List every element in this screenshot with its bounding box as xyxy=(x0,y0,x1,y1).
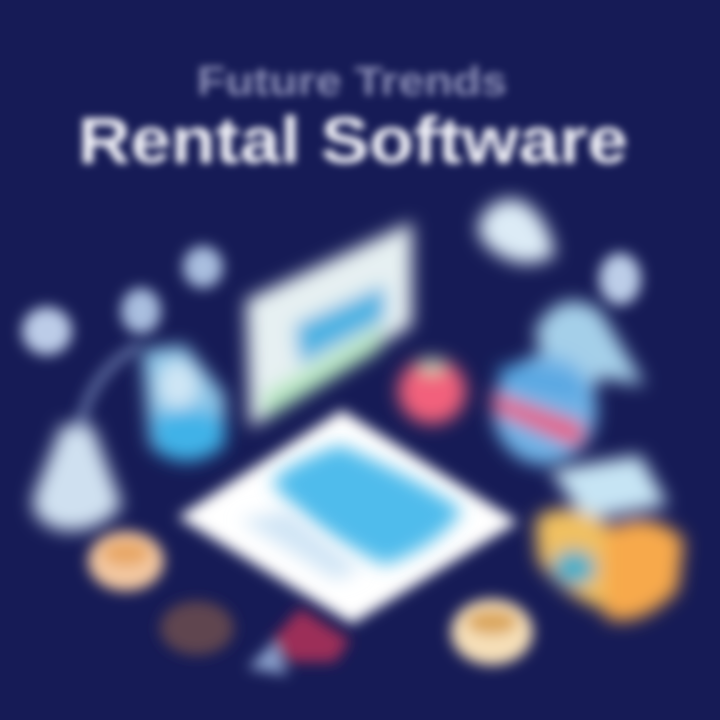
icon: flask left xyxy=(33,425,122,531)
icon: blue bottle xyxy=(142,345,225,461)
subtitle: Future Trends: Future Trends xyxy=(197,58,507,104)
icon: cream token xyxy=(451,599,533,665)
connector arc xyxy=(78,345,140,440)
icon: red ball xyxy=(398,358,466,424)
laptop base detail xyxy=(240,510,360,580)
laptop screen xyxy=(272,445,462,565)
icon: small cloud top xyxy=(183,246,223,288)
icon: small cloud left xyxy=(22,307,72,355)
icon: brown token xyxy=(160,601,234,655)
icon: cloud top right xyxy=(478,199,555,263)
laptop tablet xyxy=(178,410,518,624)
icon: small cloud middle xyxy=(121,288,161,334)
icon: red arrow xyxy=(248,608,350,675)
monitor panel xyxy=(246,222,412,428)
icon: orange token xyxy=(88,531,164,591)
icon: small dot top right xyxy=(599,253,641,305)
box cluster right xyxy=(535,455,684,621)
icon: globe with figure xyxy=(490,301,645,465)
heading: Rental Software: Rental Software xyxy=(78,103,628,177)
